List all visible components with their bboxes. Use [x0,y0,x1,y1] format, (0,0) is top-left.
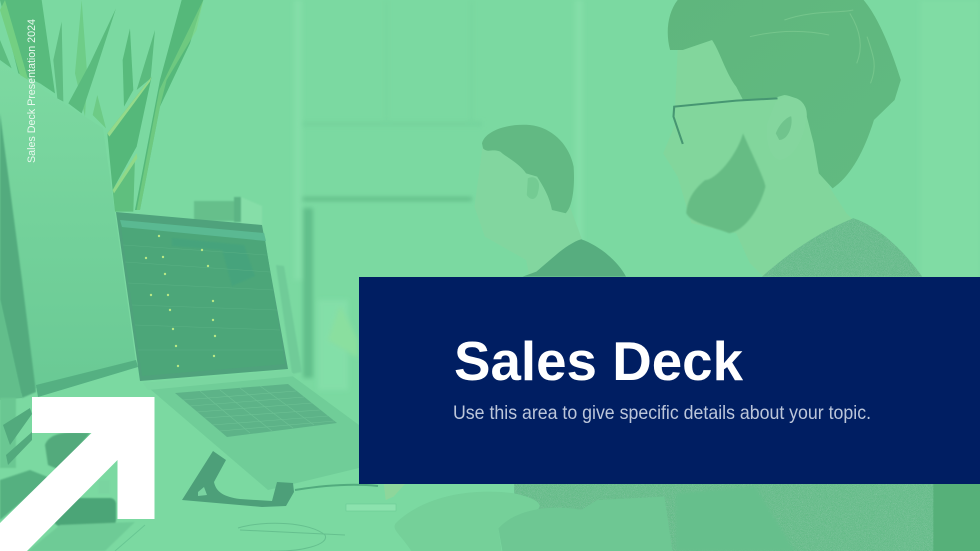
subtitle: Use this area to give specific details about your topic. [453,402,871,424]
shirt [523,239,626,277]
white arrow icon [0,397,154,551]
monitor [0,63,138,468]
background man [474,125,626,277]
hair [668,0,901,188]
vertical label: Sales Deck Presentation 2024 [26,19,38,163]
laptop [116,212,359,507]
small objects behind laptop [194,197,358,390]
laptop stand [182,451,294,507]
screen [116,212,288,381]
hair [482,125,574,213]
panel: title block [359,277,980,484]
hand [395,492,540,551]
foreground man [663,0,922,277]
lower arm and sweater [384,483,980,551]
face and neck [474,143,585,277]
face and neck [663,30,888,277]
ear [527,177,539,199]
cuff [498,497,672,551]
desk items [115,485,396,551]
window frames in background [294,0,980,378]
title: Sales Deck [454,330,743,392]
plant leaves [0,0,203,212]
laptop base [143,372,359,490]
beard [686,133,765,233]
ear [767,97,807,160]
sweater [762,218,922,277]
keyboard [175,384,337,437]
glasses [674,98,778,144]
